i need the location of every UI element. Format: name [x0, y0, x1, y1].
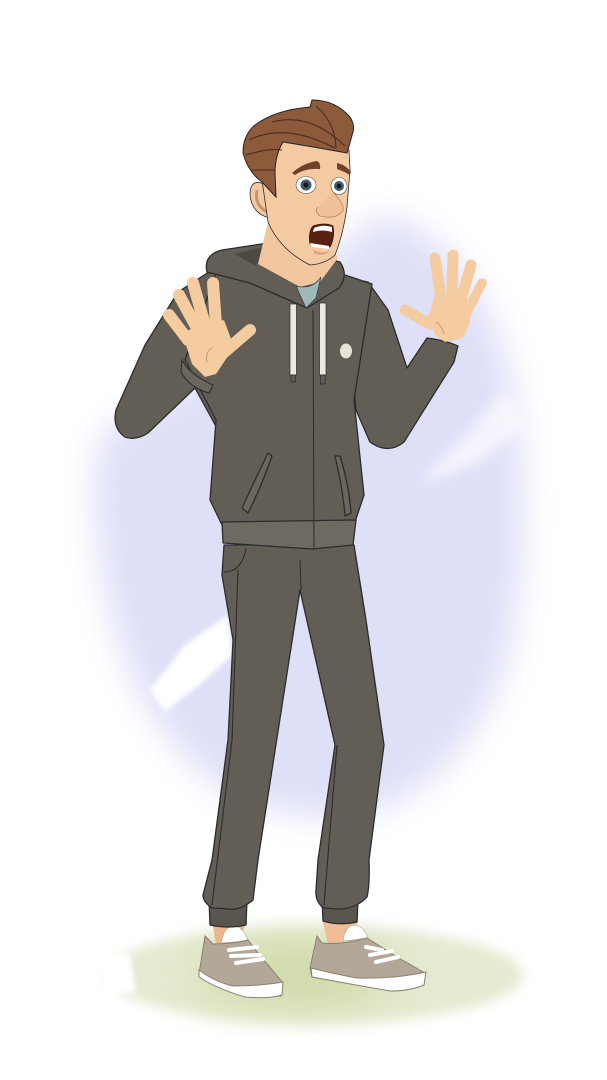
hood [206, 243, 344, 308]
right arm sleeve [345, 278, 458, 448]
mouth [309, 224, 334, 247]
left pocket [242, 453, 272, 513]
left foot and shoe [199, 920, 283, 998]
right cuff [322, 900, 358, 924]
white brush streak right [418, 390, 525, 485]
left cuff [209, 900, 247, 927]
right foot and shoe [310, 918, 426, 991]
eyes [296, 176, 316, 194]
eyebrows [292, 161, 320, 175]
background: lavender watercolor blob [95, 215, 525, 817]
torso [185, 268, 372, 525]
nose [316, 192, 343, 217]
t-shirt collar [296, 277, 321, 308]
hoodie drawstrings [290, 303, 326, 384]
right pocket [335, 456, 351, 516]
ground: green grass patch [98, 926, 523, 1024]
head [243, 100, 354, 265]
left sleeve cuff [181, 360, 213, 393]
white brush streak left [150, 615, 232, 712]
face [262, 140, 350, 265]
center zip [313, 310, 314, 549]
laces [229, 947, 263, 963]
left arm sleeve [115, 268, 218, 438]
right hand [405, 255, 482, 342]
waistband [222, 520, 356, 549]
neck [258, 200, 338, 287]
badge on chest [340, 344, 352, 358]
left hand [169, 283, 250, 377]
laces [366, 947, 398, 962]
hoodie [115, 243, 458, 549]
inner hood shadow [234, 246, 268, 266]
hair [243, 100, 354, 197]
trousers [203, 545, 384, 927]
ear [250, 182, 270, 218]
